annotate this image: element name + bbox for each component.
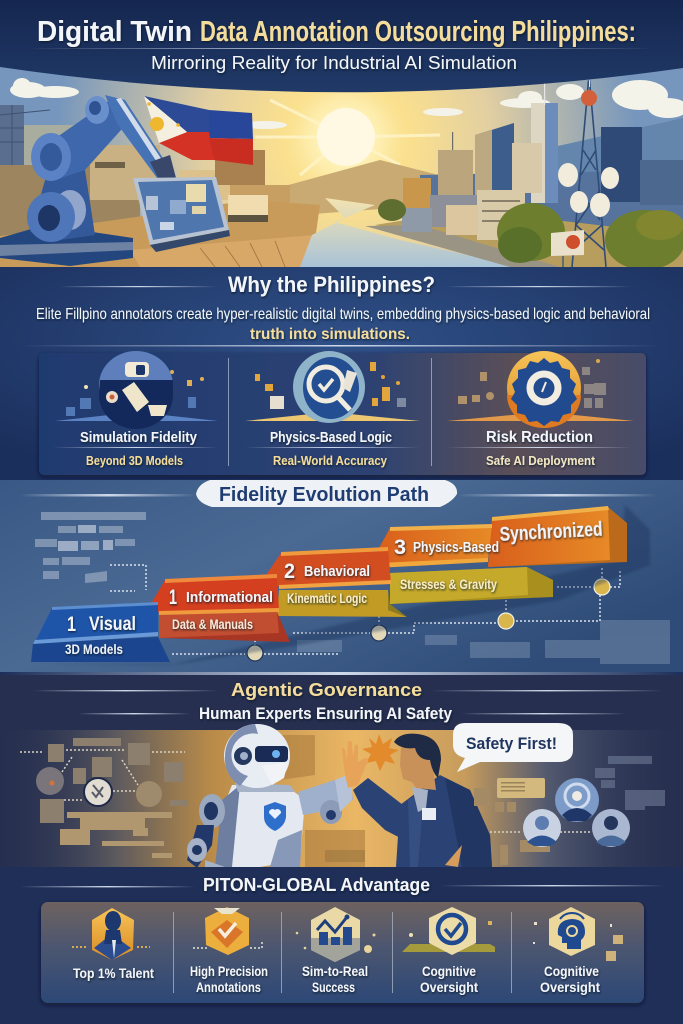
- title: [37, 16, 636, 48]
- benefit: physics-based logic: [245, 351, 420, 423]
- step 1: data and manuals: [159, 612, 290, 642]
- section: PITON-GLOBAL advantage: [0, 867, 683, 1024]
- section heading: Why the Philippines?: [228, 272, 435, 297]
- ground and waterfront: [0, 200, 320, 267]
- icon: Philippine flag: [144, 96, 253, 165]
- step 0: 3D models: 3D Models: [65, 642, 123, 657]
- intro text: truth into simulations.: [250, 326, 410, 343]
- step 3: physics-based: 3: [394, 536, 406, 559]
- step 3: stresses and gravity: Stresses & Gravity: [400, 577, 497, 592]
- subtitle: Mirroring Reality for Industrial AI Simulation: [151, 53, 517, 73]
- distant hills: [288, 160, 438, 214]
- label: physics-based logic: Physics-Based Logic: [270, 429, 392, 446]
- step 3: physics-based: [377, 524, 499, 568]
- banner: [0, 730, 683, 867]
- callout: safety first: Safety First!: [466, 734, 557, 753]
- badge: top talent: [72, 908, 150, 960]
- hero illustration: [0, 52, 683, 270]
- advantage label: high precision annotations: Annotations: [196, 979, 261, 995]
- connector nodes: [247, 579, 610, 661]
- title: Digital Twin: [37, 16, 192, 48]
- advantage label: cognitive oversight: Cognitive: [422, 963, 476, 979]
- connectors: [110, 565, 620, 654]
- pill heading: [196, 480, 457, 507]
- step 0: 3D models: [31, 637, 170, 662]
- badge: cognitive oversight brain: [533, 907, 623, 961]
- tablet: [133, 177, 230, 252]
- step 1: informational: [152, 574, 279, 615]
- advantage label: cognitive oversight second: Cognitive: [544, 963, 599, 979]
- advantage label: sim-to-real success: Success: [312, 979, 355, 995]
- pill heading: Fidelity Evolution Path: [219, 484, 429, 506]
- step 1: informational: Informational: [186, 589, 273, 606]
- data fragments left: [35, 512, 146, 583]
- step: synchronized: Synchronized: [499, 519, 603, 546]
- heading: Agentic Governance: [231, 680, 422, 700]
- expert avatar 2: [523, 809, 561, 847]
- left industrial buildings: [0, 105, 290, 240]
- step 2: kinematic logic: [277, 590, 407, 617]
- review console and experts: [474, 756, 665, 865]
- subheading: Human Experts Ensuring AI Safety: [199, 704, 452, 723]
- advantage label: high precision annotations: [190, 963, 268, 995]
- section: agentic governance: [0, 675, 683, 872]
- advantage label: cognitive oversight second: Oversight: [540, 979, 600, 995]
- caption: safe AI deployment: Safe AI Deployment: [486, 453, 596, 468]
- caption: beyond 3D models: Beyond 3D Models: [86, 453, 183, 468]
- panel: advantages: [41, 902, 644, 1003]
- benefit: simulation fidelity: [55, 351, 218, 429]
- expert avatar 3: [592, 809, 630, 847]
- clouds: [10, 78, 683, 129]
- label: risk reduction: Risk Reduction: [486, 429, 593, 446]
- badge: sim-to-real: [296, 907, 376, 962]
- expert avatar 1: [555, 778, 599, 822]
- badge: cognitive oversight: [402, 907, 495, 955]
- step: synchronized: [488, 506, 627, 567]
- river: [300, 198, 520, 267]
- icon: sun: [255, 97, 440, 177]
- step 2: behavioral: 2: [284, 560, 295, 583]
- step 0: visual: 1: [67, 613, 76, 636]
- billboard: [551, 230, 584, 267]
- step 3: stresses and gravity: [390, 567, 553, 604]
- intro text: [36, 306, 650, 343]
- section: fidelity evolution path: [0, 480, 683, 675]
- step 1: informational: 1: [169, 586, 177, 609]
- advantage label: high precision annotations: High Precision: [190, 963, 268, 979]
- heading: PITON-GLOBAL Advantage: [203, 874, 430, 895]
- step 2: behavioral: Behavioral: [304, 563, 370, 580]
- step 2: kinematic logic: Kinematic Logic: [287, 591, 367, 606]
- caption: real-world accuracy: Real-World Accuracy: [273, 453, 388, 468]
- data fragments right: [297, 620, 670, 664]
- workflow icons left: [20, 738, 188, 858]
- icon: robot: [187, 724, 353, 868]
- step 2: behavioral: [266, 547, 391, 589]
- icon: telecom tower: [558, 79, 619, 267]
- advantage label: sim-to-real success: [302, 963, 368, 995]
- step 1: data and manuals: Data & Manuals: [172, 617, 253, 632]
- step shadows: [40, 505, 650, 665]
- callout: safety first: [453, 723, 573, 772]
- step 0: visual: Visual: [89, 614, 136, 635]
- trees: [378, 199, 683, 270]
- icon: human expert: [342, 734, 492, 867]
- step 3: physics-based: Physics-Based: [413, 539, 499, 556]
- advantage label: cognitive oversight: Oversight: [420, 979, 478, 995]
- badge: high precision: [193, 907, 262, 955]
- benefit: risk reduction: [447, 351, 634, 428]
- robot arm: [0, 95, 176, 266]
- label: simulation fidelity: Simulation Fidelity: [80, 429, 198, 446]
- city skyline: [402, 84, 683, 240]
- advantage label: cognitive oversight second: [540, 963, 600, 995]
- warm background blocks: [240, 735, 365, 867]
- advantage label: top talent: Top 1% Talent: [73, 965, 154, 981]
- step 0: visual: [33, 602, 158, 644]
- section: why the Philippines: [0, 267, 683, 480]
- icon: impact star: [362, 734, 399, 771]
- header: [0, 0, 683, 125]
- advantage label: sim-to-real success: Sim-to-Real: [302, 963, 368, 979]
- advantage label: cognitive oversight: [420, 963, 478, 995]
- panel: benefits: [39, 351, 646, 475]
